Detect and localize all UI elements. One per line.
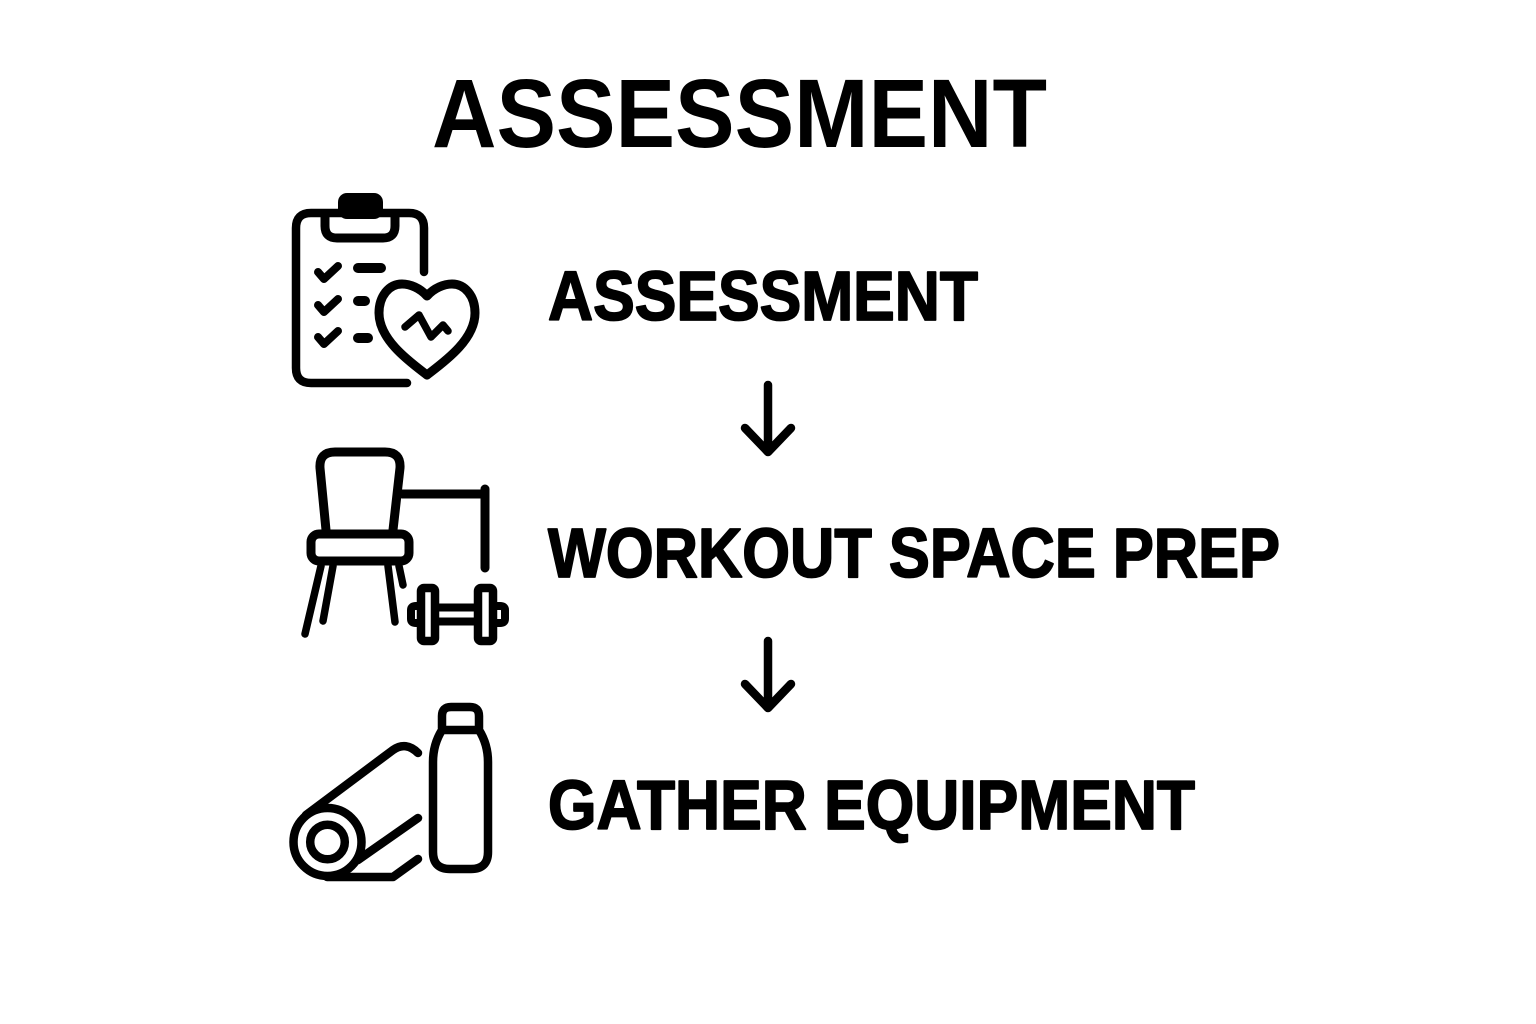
arrow: assessment to workout space prep bbox=[745, 385, 791, 452]
step label: assessment: ASSESSMENT bbox=[548, 257, 978, 335]
icon: chair, desk and dumbbell bbox=[305, 452, 505, 641]
arrow: workout space prep to gather equipment bbox=[745, 641, 791, 708]
step label: gather equipment: GATHER EQUIPMENT bbox=[548, 766, 1195, 844]
title: ASSESSMENT bbox=[432, 59, 1047, 168]
step label: workout space prep: WORKOUT SPACE PREP bbox=[548, 514, 1280, 592]
icon: rolled mat and water bottle bbox=[294, 707, 488, 877]
icon: clipboard with heart bbox=[296, 193, 475, 383]
